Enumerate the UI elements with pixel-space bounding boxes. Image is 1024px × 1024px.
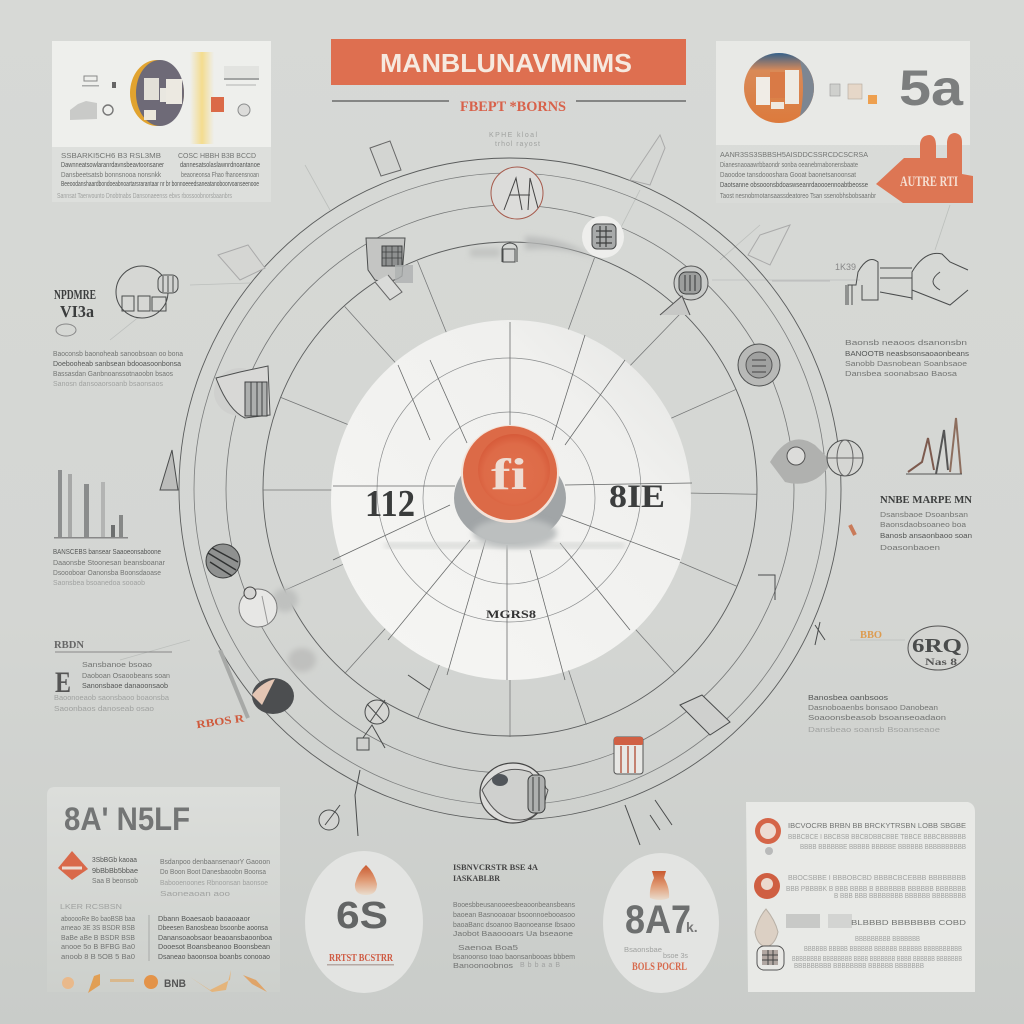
right sketch: arches: 1K39 [835, 262, 856, 272]
text block: SSBARKI5CH6 B3 RSL3MB [61, 153, 161, 160]
icon: white bulb [239, 587, 298, 627]
handwritten label: VI3a [60, 302, 94, 321]
text block: beaoneonsa Fhao fhanoensnoan [181, 172, 259, 179]
text block: COSC HBBH B3B BCCD [178, 153, 256, 160]
icon: dark blob [252, 678, 294, 714]
top ring sketch note boxes [218, 135, 790, 280]
orange tag: AUTRE RTI [900, 174, 958, 190]
oval callout right: Bsaonsbae [624, 947, 662, 954]
center bottom text block: Booesbbeusanooeesbeaoonbeansbeans [453, 902, 575, 909]
center bottom text block: Banoonoobnos [453, 963, 514, 970]
left text block 2: Dsoooboar Oanonsba Boonsdaoase [53, 570, 161, 577]
faint construction lines [110, 165, 950, 660]
row 1: IBCVOCRB BRBN BB BRCKYTRSBN LOBB SBGBE [788, 823, 966, 830]
item description: Do Boon Boot Danesbaoobn Boonsa [160, 869, 266, 876]
disc spokes [333, 322, 692, 680]
red center button: fi [491, 450, 527, 499]
left text block 2: Daaonsbe Stoonesan beansboanar [53, 560, 166, 567]
text block: dannesatsolaslawnrdnoantanoe [180, 162, 260, 169]
small caption under subtitle: trhol rayost [495, 141, 540, 148]
item text: 3SbBGb kaoaa [92, 857, 137, 864]
concentric rings [179, 158, 841, 820]
oval callout right: BOLS POCRL [632, 959, 687, 973]
right text block 3: Banosbea oanbsoos [808, 695, 889, 702]
oval callout left [305, 851, 423, 993]
item description: Bsdanpoo denbaansenaorY Gaooon [160, 859, 270, 866]
icon: dark round stamp [660, 266, 708, 315]
right text block 3 [808, 695, 946, 734]
red center button [454, 425, 566, 548]
table: anoob 8 B 5OB 5 Ba0 [61, 954, 135, 961]
row 2: B BBB BBB BBBBBBBB BBBBBB BBBBBBBB [834, 893, 966, 900]
oval callout left: 6S [336, 895, 388, 937]
left text block 3 with glyph [54, 640, 172, 713]
row 2 [754, 873, 966, 900]
icon: blue orange badge [744, 53, 814, 123]
left text block 3 with glyph: Sansbanoe bsoao [82, 662, 152, 669]
icon: red barred box [614, 737, 643, 774]
left text block 1: Bassasdan Ganbnoanssotnaoobn bsaos [53, 371, 173, 378]
small caption under subtitle: KPHE kloal [489, 132, 537, 139]
right text block 2: NNBE MARPE MN [880, 495, 973, 506]
row 1 [755, 818, 966, 855]
left sketch: label and lamp [54, 266, 178, 336]
lamp sketch [116, 266, 178, 318]
center bottom text block: Jaobot Baaoooars Ua bseaone [453, 931, 573, 938]
panel: top left [52, 41, 271, 202]
row 3: BBBBBBBBB BBBBBBB [855, 936, 920, 943]
left text block 3 with glyph: Sanonsbaoe danaoonsaob [82, 683, 168, 690]
left text block 3 with glyph: Daoboan Osaoobeans soan [82, 673, 170, 680]
center bottom text block: BbbaaB [520, 962, 560, 969]
disc inner rings [377, 358, 641, 622]
lower value label: MGRS8 [486, 607, 536, 621]
panel: bottom left [47, 787, 280, 993]
center bottom text block: IASKABLBR [453, 874, 500, 883]
oval callout right [603, 853, 719, 993]
icon: cone smudge [220, 648, 316, 718]
table [61, 915, 272, 961]
right value: 8IE [609, 479, 665, 515]
right text block 1: Sanobb Dasnobean Soanbsaoe [845, 361, 967, 368]
orange icon row [62, 970, 267, 993]
right text block 1: Dansbea soonabsao Baosa [845, 371, 957, 378]
right sketch: arches [772, 253, 968, 305]
small grey pictograms [70, 76, 116, 120]
text block: Daotsanne obsooonsbdoaswseanrdaoooennoabtbeosse [720, 182, 868, 189]
title banner: MANBLUNAVMNMS [380, 48, 632, 78]
row 4: QR icon: BBBBBBBBB BBBBBBBB BBBBBB BBBBBBB [794, 963, 924, 970]
item description: Saoneaoan aoo [160, 891, 230, 898]
icon: white circle grid [582, 216, 624, 258]
right text block 2: Banosb ansaonbaoo soan [880, 533, 972, 540]
text block: Beeoodanshaardbondoeabnoartarsrarantaar nr br bonnoeeedsaneatanoboorvoanseenooe [61, 181, 259, 188]
center bottom text block: Saenoa Boa5 [458, 945, 518, 952]
icon: small arch [502, 243, 517, 262]
center bottom text block: ISBNVCRSTR BSE 4A [453, 863, 538, 872]
item description [160, 859, 270, 898]
orange tag [876, 133, 973, 203]
table: Dbeesen Banosbeao bsoonbe aoonsa [158, 925, 268, 932]
central disc [331, 320, 692, 680]
right text block 2: Dsansbaoe Dsoanbsan [880, 512, 968, 519]
row 1: BBBCBCE I BBCBSB BBCBDBBCBBE TBBCE BBBCBBBBBB [788, 834, 966, 841]
icon: flame egg [355, 865, 377, 895]
orange icon row: BNB [164, 978, 186, 990]
icon: lantern [160, 450, 178, 490]
center bottom text block [453, 863, 575, 970]
table heading: LKER RCSBSN [60, 904, 122, 911]
chart: right spike chart [906, 418, 962, 474]
left text block 1: Sanosn dansoaorsoanb bsaonsaos [53, 381, 163, 388]
table: Dooesot Boansbeanoo Boonsbean [158, 944, 270, 951]
left text block 1 [53, 351, 183, 388]
row 3 [755, 909, 966, 947]
panel: bottom right [746, 802, 975, 992]
row 2: BBOCSBBE I BBBOBCBD BBBBCBCEBBB BBBBBBBB [788, 875, 966, 882]
text block: Daoodoe tansdoooshara Gooat baonetsanoonsat [720, 172, 856, 179]
right text block 3: Dasnoboaenbs bonsaoo Danobean [808, 705, 938, 712]
icon: lower sphere [480, 763, 548, 823]
right text block 3: Soaoonsbeasob bsoanseoadaon [808, 715, 946, 722]
right text block 1: BANOOTB neasbsonsaoaonbeans [845, 351, 970, 358]
left value: 112 [365, 483, 415, 525]
oval callout right: k. [686, 919, 698, 935]
panel: top right [716, 41, 973, 203]
subtitle: FBEPT *BORNS [460, 99, 566, 115]
red small tile [211, 97, 224, 112]
handwritten label: NPDMRE [54, 288, 96, 303]
text block: Dansbeetsatsb bonnsnooa nonsnkk [61, 172, 161, 179]
table: BaBe aBe B BSDR BSB [61, 935, 135, 942]
left text block 2 [53, 549, 166, 587]
text block [720, 152, 877, 200]
text block [57, 153, 260, 200]
text block: Taost nesnobrnotansaassdeatoreo Tsan ssenobhsbobsaanbr [720, 193, 877, 200]
item description: Babooenoones Rbnoonsan baonsoe [160, 880, 268, 887]
left text block 2: BANSCEBS bansear Saaoeonsaboone [53, 549, 161, 556]
icon: lower left sketch [357, 700, 389, 750]
row 2: BBB PBBBBK B BBB BBBB B BBBBBBB BBBBBB BBBBBBB [786, 886, 966, 893]
left text block 3 with glyph: Baoonoeaob saonsbaoo boaonsba [54, 695, 169, 702]
spokes outside disc [263, 258, 757, 737]
oval callout right: 8A7 [625, 898, 691, 942]
right text block 2 [880, 495, 973, 552]
chart: vertical bars [54, 470, 128, 538]
left text block 2: Saonsbea bsoanedoa sooaob [53, 580, 145, 587]
right text block 1: Baonsb neaoos dsanonsbn [845, 340, 967, 347]
icon: red bottle [650, 871, 669, 900]
row 4: QR icon: BBBBBBBB BBBBBBBB BBBB BBBBBBB BBBB BBBBBB BBBBBBB [792, 956, 962, 963]
icon: small sketch mid right marker [408, 525, 855, 735]
item text: Saa B beonsob [92, 878, 138, 885]
icon: right small seal [860, 626, 968, 670]
icon: right small seal: BBO [860, 629, 882, 641]
text block: Dawnneatsowlaranrdavnsbeavtoonsaner [61, 162, 165, 169]
table: Dbann Boaesaob baoaoaaor [158, 916, 251, 923]
grey mini header [224, 66, 259, 86]
icon: striped sphere [206, 544, 240, 578]
oval callout left: RRTST BCSTRR [329, 952, 394, 964]
icon: pot with building left [214, 366, 270, 418]
red small tag text: RBOS R [196, 713, 246, 731]
icon: round coin right [738, 344, 780, 386]
icon: gray blob and globe [770, 439, 863, 484]
table: Dsaneao baoonsoa boanbs conooao [158, 954, 270, 961]
text block: Dianesnaoaawrbbaondr sonba oeanebrnabonensbaate [720, 162, 858, 169]
table: Danansoaobsaor beaoansbaoonboa [158, 935, 272, 942]
row 4: QR icon: BBBBBB BBBBB BBBBBB BBBBBB BBBBBB BBBBBBBBBB [804, 946, 962, 953]
soft horizon streak [385, 543, 625, 548]
panel heading: 8A' N5LF [64, 801, 190, 837]
icon: orange purple globe [130, 60, 184, 126]
table: ameao 3E 3S BSDR BSB [61, 925, 135, 932]
title banner [331, 39, 686, 85]
small building pictograms [830, 84, 877, 104]
icon: right small seal: Nas 8 [925, 657, 958, 667]
large grey label: 5a [899, 60, 964, 116]
center bottom text block: bsanoonso toao baonsanbooas bbbem [453, 954, 575, 961]
small caption under subtitle [489, 132, 540, 148]
table: anooe 5o B BFBG Ba0 [61, 944, 135, 951]
right text block 2: Baonsdaobsoaneo boa [880, 522, 966, 529]
row 4: QR icon [757, 946, 962, 970]
table: abooooRe Bo baoBSB baa [61, 916, 135, 923]
icon: shield building [366, 238, 413, 300]
center bottom text block: baoean Basnooaoar bsoonnoebooasoo [453, 912, 575, 919]
text block: Sannsat Taenvounto Dnobtnabs Dansonaeenss ebvs rbossoobnorsbaanbrs [57, 193, 232, 200]
text block: AANR3SS3SBBSH5AISDDCSSRCDCSCRSA [720, 152, 868, 159]
row 3: BLBBBD BBBBBBB COBD [851, 920, 966, 927]
icon: circled pin top [491, 167, 543, 219]
left text block 3 with glyph: Saoonbaos danoseab osao [54, 706, 154, 713]
right text block 1 [845, 340, 970, 378]
icon: red diamond [58, 851, 88, 880]
ring shading band [470, 236, 600, 262]
icon: right small seal: 6RQ [912, 635, 962, 657]
center bottom text block: baoaBanc dsoanoo Baonoeanse Ibsaoo [453, 922, 575, 929]
right text block 2: Doasonbaoen [880, 545, 940, 552]
small sketch bottom ring ticks [319, 770, 672, 845]
right text block 3: Dansbeao soansb Bsoanseaoe [808, 727, 940, 734]
row 1: BBBB BBBBBBE BBBBB BBBBBE BBBBBB BBBBBBBBBB [800, 844, 966, 851]
left text block 3 with glyph: E [55, 666, 71, 699]
left text block 1: Baoconsb baonoheab sanoobsoan oo bona [53, 351, 183, 358]
item text [92, 857, 138, 885]
handwritten label [54, 288, 96, 336]
left text block 3 with glyph: RBDN [54, 640, 85, 651]
left text block 1: Doebooheab sanbsean bdooasoonbonsa [53, 361, 181, 368]
item text: 9bBbBb5bbae [92, 868, 138, 875]
small grey face icon [238, 104, 250, 116]
oval callout right: bsoe 3s [663, 953, 688, 960]
